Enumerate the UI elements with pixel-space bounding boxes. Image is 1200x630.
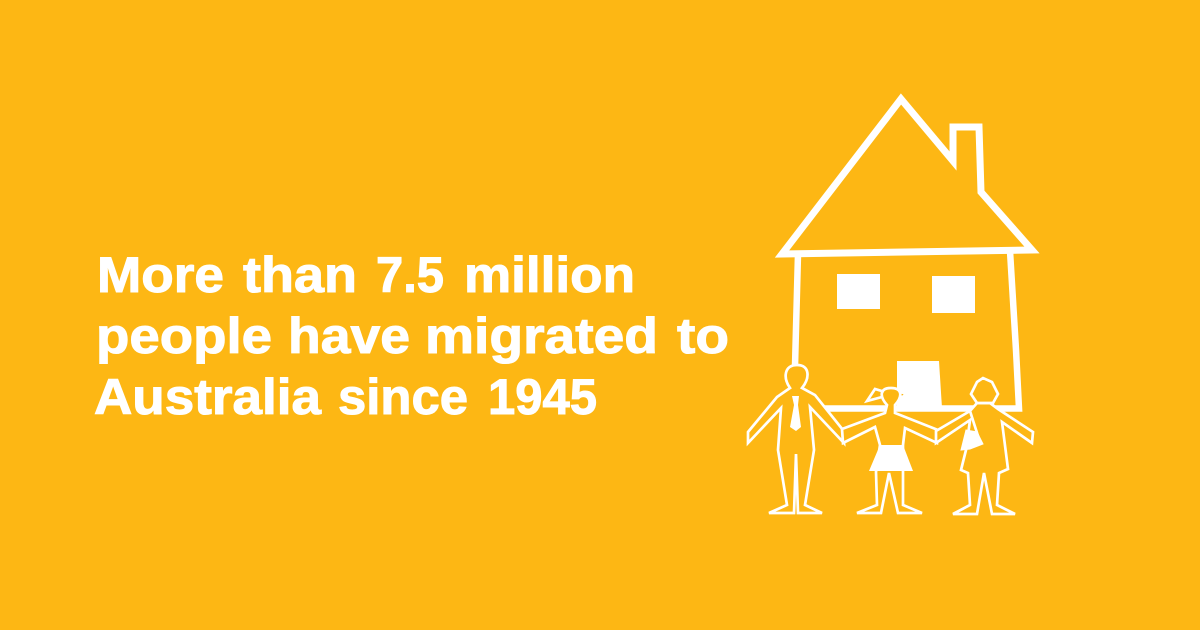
icon: family holding hands bbox=[748, 365, 1033, 514]
title: Australia bbox=[94, 369, 322, 425]
title: since bbox=[338, 369, 468, 425]
title: than bbox=[243, 247, 357, 303]
girl bbox=[842, 388, 938, 513]
man bbox=[748, 365, 844, 513]
handbag bbox=[970, 411, 978, 436]
title: have bbox=[288, 308, 410, 364]
icon: house bbox=[782, 99, 1032, 408]
house roof and chimney bbox=[782, 99, 1032, 254]
tie bbox=[790, 396, 801, 431]
title: More bbox=[97, 247, 224, 303]
woman bbox=[936, 378, 1033, 514]
skirt bbox=[869, 445, 913, 471]
right window bbox=[932, 276, 975, 313]
title: people bbox=[96, 308, 272, 364]
title bbox=[94, 247, 729, 425]
title: 7.5 bbox=[376, 247, 444, 303]
house walls and floor bbox=[795, 251, 1019, 408]
left window bbox=[837, 274, 880, 309]
title: to bbox=[677, 308, 729, 364]
title: million bbox=[464, 247, 635, 303]
title: 1945 bbox=[488, 369, 597, 425]
door bbox=[897, 361, 942, 408]
title: migrated bbox=[425, 308, 658, 364]
